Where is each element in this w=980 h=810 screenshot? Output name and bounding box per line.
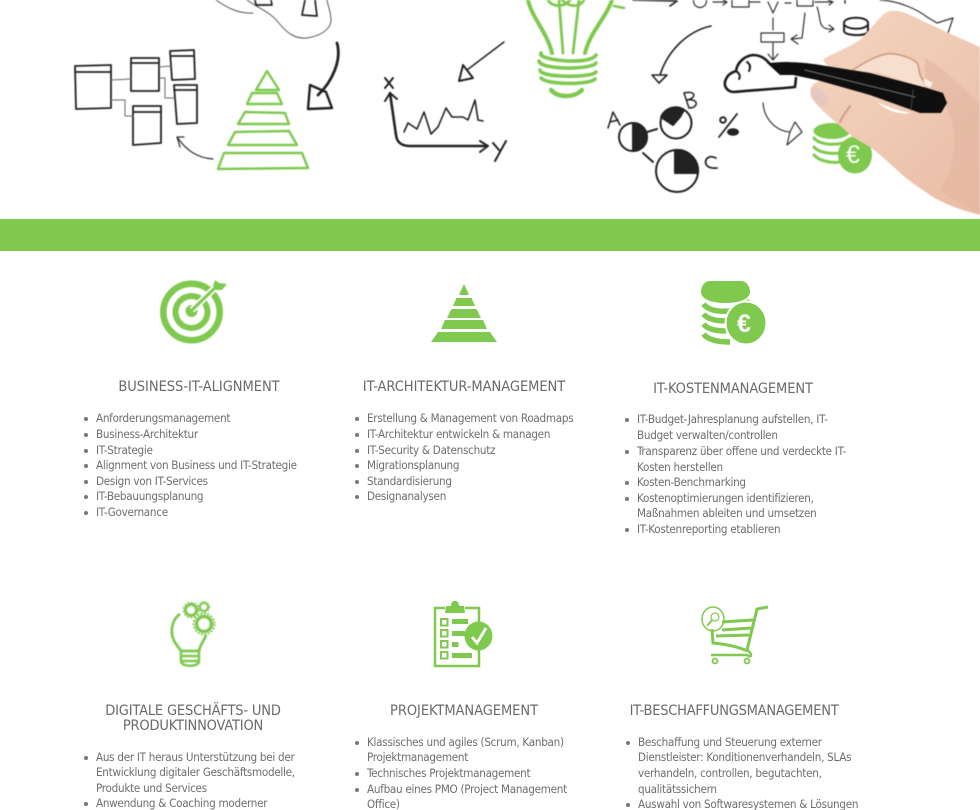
sketch: cloud — [725, 55, 796, 92]
sketch: green euro coins — [814, 123, 872, 174]
list: Business-IT-Alignment: IT-Strategie — [96, 443, 153, 457]
list: IT-Architektur-Management: Designanalysen — [367, 489, 446, 503]
list: IT-Kostenmanagement: IT-Kostenreporting etablieren — [637, 522, 780, 536]
sketch: arrow from pyramid to org chart — [177, 137, 213, 159]
list: IT-Beschaffungsmanagement: qualitätssichern — [638, 782, 717, 796]
sketch: flow diagram — [633, 0, 953, 60]
heading: IT-Architektur-Management: IT-ARCHITEKTUR-MANAGEMENT — [363, 379, 565, 395]
list: IT-Kostenmanagement: Kosten-Benchmarking — [637, 475, 746, 489]
list: IT-Architektur-Management: IT-Architektur entwickeln & managen — [367, 427, 550, 441]
list: IT-Architektur-Management: IT-Security & Datenschutz — [367, 443, 495, 457]
sketch: xy line chart — [385, 42, 506, 161]
list: IT-Architektur-Management: Migrationsplanung — [367, 458, 459, 472]
sketch: curved arrow to pie charts — [652, 26, 711, 83]
list: Digitale Geschäfts- und Produktinnovation: Entwicklung digitaler Geschäftsmodelle, — [96, 765, 295, 779]
list: Business-IT-Alignment: Alignment von Business und IT-Strategie — [96, 458, 297, 472]
list: Projektmanagement: Technisches Projektmanagement — [367, 766, 530, 780]
list: IT-Kostenmanagement: Budget verwalten/controllen — [637, 428, 778, 442]
list: IT-Architektur-Management — [355, 411, 574, 503]
list: Projektmanagement: Klassisches und agiles (Scrum, Kanban) — [367, 735, 564, 749]
list: Business-IT-Alignment: Design von IT-Services — [96, 474, 208, 488]
icon: coin stack with euro: € — [737, 310, 751, 338]
heading: Digitale Geschäfts- und Produktinnovation — [105, 702, 281, 734]
sketch: top thought bubble — [216, 0, 331, 38]
hero sketch illustration — [73, 0, 980, 216]
list: IT-Beschaffungsmanagement: verhandeln, controllen, begutachten, — [638, 766, 822, 780]
list: IT-Kostenmanagement: Maßnahmen ableiten und umsetzen — [637, 506, 816, 520]
list: Digitale Geschäfts- und Produktinnovation: Anwendung & Coaching moderner — [96, 796, 267, 810]
sketch: pie charts A B C — [608, 92, 738, 192]
list: IT-Kostenmanagement: Transparenz über offene und verdeckte IT- — [637, 444, 846, 458]
list: Projektmanagement: Aufbau eines PMO (Project Management — [367, 782, 567, 796]
list: IT-Beschaffungsmanagement: Dienstleister: Konditionenverhandeln, SLAs — [638, 750, 851, 764]
heading: Digitale Geschäfts- und Produktinnovation: PRODUKTINNOVATION — [123, 718, 263, 734]
sketch: organisation chart — [75, 50, 197, 145]
list: Business-IT-Alignment: Anforderungsmanagement — [96, 411, 230, 425]
list: Business-IT-Alignment: IT-Bebauungsplanung — [96, 489, 203, 503]
list: IT-Kostenmanagement: IT-Budget-Jahresplanung aufstellen, IT- — [637, 412, 828, 426]
list: IT-Architektur-Management: Erstellung & Management von Roadmaps — [367, 411, 573, 425]
list: IT-Kostenmanagement — [625, 412, 846, 536]
sketch: green pyramid — [218, 71, 308, 169]
list: IT-Beschaffungsmanagement: Beschaffung und Steuerung externer — [638, 735, 822, 749]
green band — [0, 219, 980, 251]
list: Business-IT-Alignment: IT-Governance — [96, 505, 168, 519]
list: Digitale Geschäfts- und Produktinnovation: Aus der IT heraus Unterstützung bei der — [96, 750, 295, 764]
heading: IT-Kostenmanagement: IT-KOSTENMANAGEMENT — [653, 381, 813, 397]
sketch: hand with marker — [767, 11, 980, 215]
list: Projektmanagement: Projektmanagement — [367, 750, 468, 764]
list: Projektmanagement — [355, 735, 567, 810]
list: Business-IT-Alignment — [84, 411, 297, 519]
sketch: green euro coins: € — [846, 141, 860, 169]
list: IT-Architektur-Management: Standardisierung — [367, 474, 452, 488]
list: Digitale Geschäfts- und Produktinnovation: Produkte und Services — [96, 781, 207, 795]
heading: Projektmanagement: PROJEKTMANAGEMENT — [390, 703, 538, 719]
list: IT-Beschaffungsmanagement — [626, 735, 858, 810]
sketch: arrow to coins — [763, 103, 802, 145]
heading: IT-Beschaffungsmanagement: IT-BESCHAFFUNGSMANAGEMENT — [630, 703, 838, 719]
list: IT-Kostenmanagement: Kostenoptimierungen identifizieren, — [637, 491, 814, 505]
sketch: green light bulb — [528, 0, 624, 96]
list: Digitale Geschäfts- und Produktinnovation — [84, 750, 295, 810]
sketch: large curved arrow — [308, 43, 338, 109]
heading: Business-IT-Alignment: BUSINESS-IT-ALIGNMENT — [118, 379, 280, 395]
list: Business-IT-Alignment: Business-Architektur — [96, 427, 198, 441]
heading: Digitale Geschäfts- und Produktinnovation: DIGITALE GESCHÄFTS- UND — [105, 703, 281, 719]
list: IT-Kostenmanagement: Kosten herstellen — [637, 460, 723, 474]
